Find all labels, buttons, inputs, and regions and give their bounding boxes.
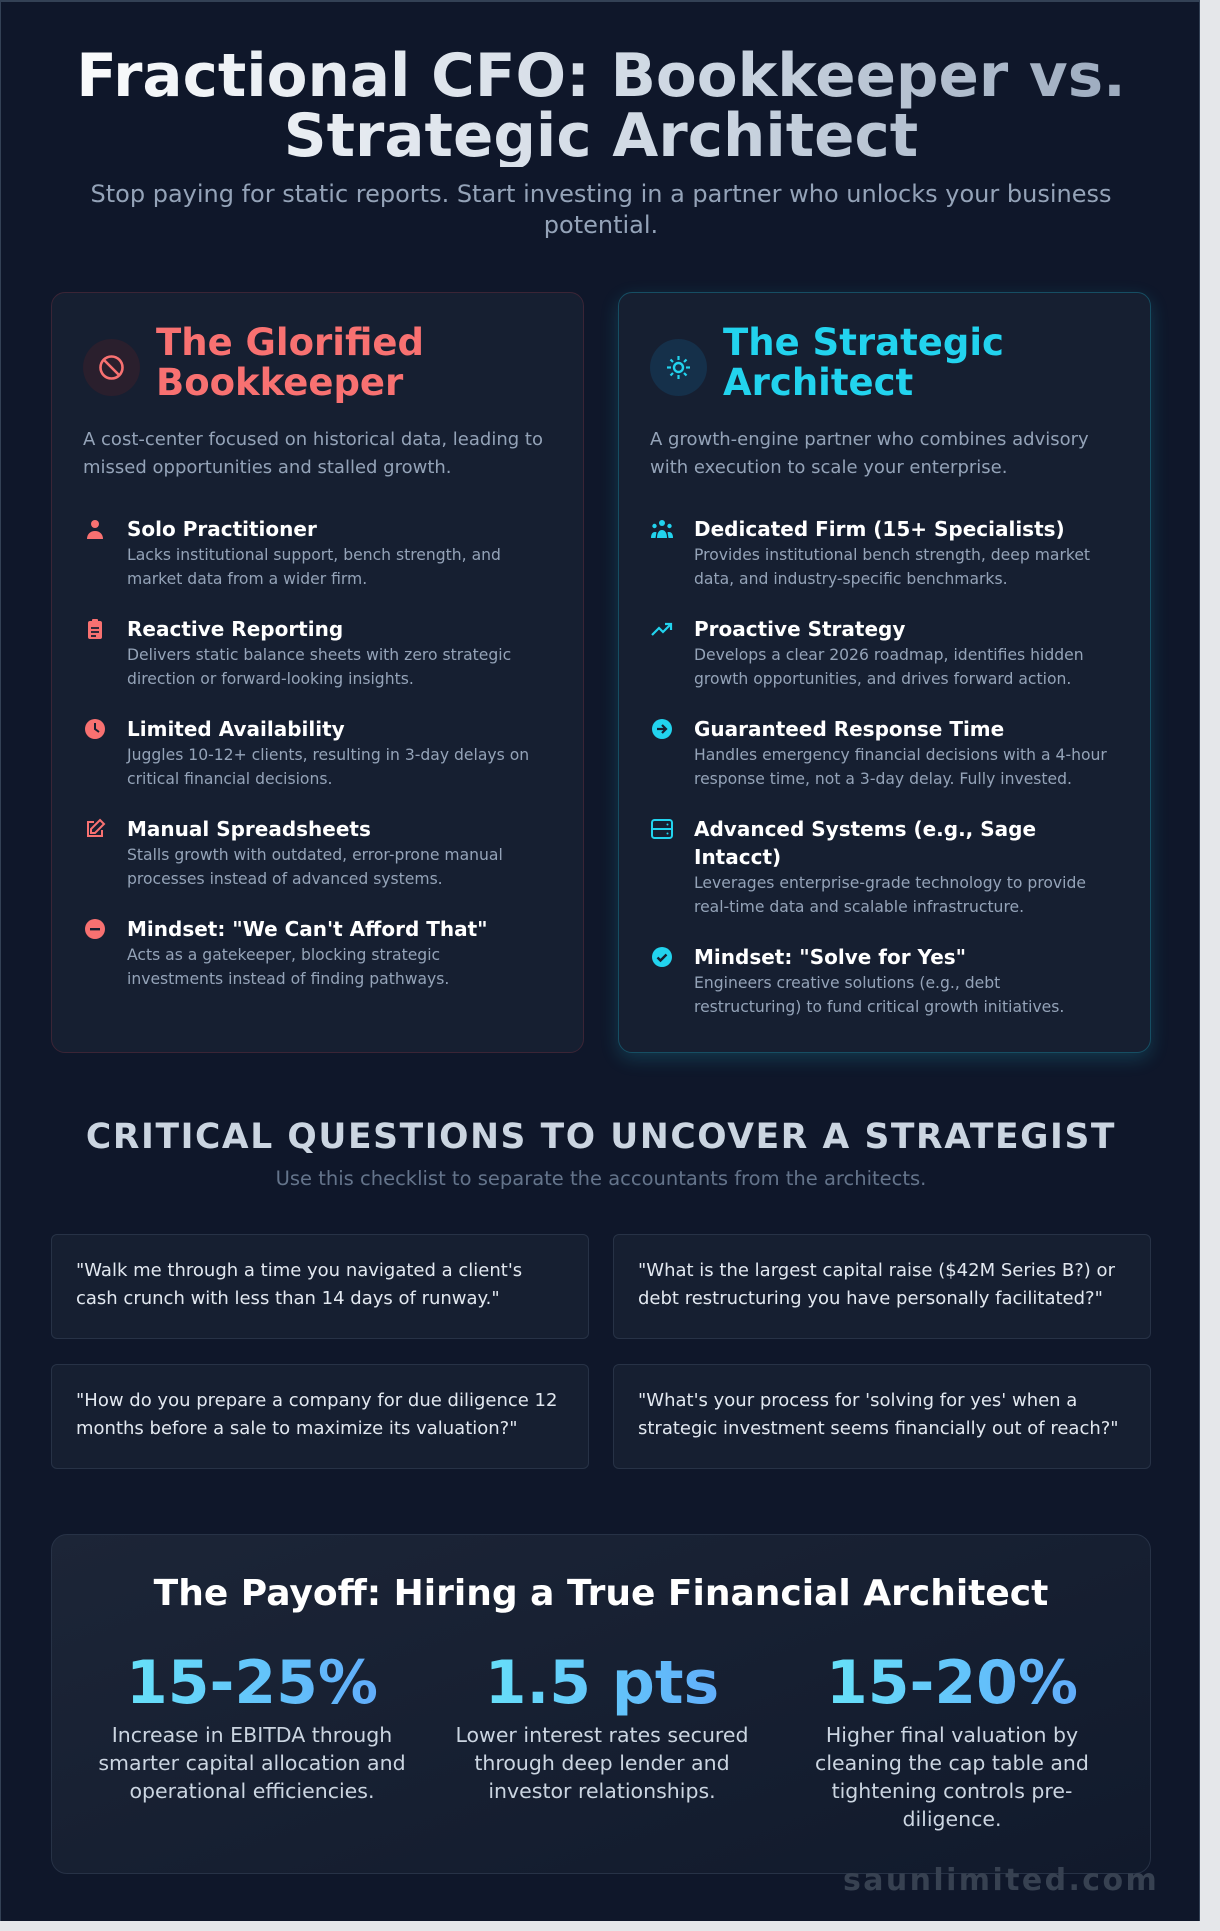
icon: clipboard xyxy=(88,619,102,639)
item: limited availability: Juggles 10-12+ clients, resulting in 3-day delays on critical financial decisions. xyxy=(127,746,529,788)
watermark: saunlimited.com xyxy=(843,1863,1159,1898)
icon: person xyxy=(87,520,103,539)
item: reactive reporting xyxy=(88,617,511,688)
title xyxy=(1,47,1201,167)
title: Fractional CFO: Bookkeeper vs. xyxy=(76,42,1126,111)
heading: critical questions: CRITICAL QUESTIONS TO UNCOVER A STRATEGIST xyxy=(86,1117,1116,1157)
title: Strategic Architect xyxy=(284,102,918,171)
heading: glorified bookkeeper: Bookkeeper xyxy=(156,361,403,404)
item: proactive strategy: Proactive Strategy xyxy=(694,617,905,641)
icon: pencil square xyxy=(87,818,106,837)
stat: valuation: Higher final valuation by cleaning the cap table and tightening controls pre-diligence. xyxy=(815,1723,1089,1831)
question 3: "How do you prepare a company for due diligence 12 months before a sale to maximize its valuation?" xyxy=(76,1390,557,1439)
item: limited availability xyxy=(85,717,529,788)
stat: interest xyxy=(455,1648,749,1803)
question 4 xyxy=(613,1364,1151,1469)
item: guaranteed response: Guaranteed Response Time xyxy=(694,717,1004,741)
item: mindset cant afford: Mindset: "We Can't Afford That" xyxy=(127,917,488,941)
stat: ebitda: Increase in EBITDA through smarter capital allocation and operational efficiencies. xyxy=(98,1723,406,1803)
item: solve for yes: Mindset: "Solve for Yes" xyxy=(694,945,966,969)
item: solve for yes: Engineers creative solutions (e.g., debt restructuring) to fund critical growth initiatives. xyxy=(694,974,1064,1016)
item: solo practitioner xyxy=(87,517,501,588)
question 4: "What's your process for 'solving for yes' when a strategic investment seems financially out of reach?" xyxy=(638,1390,1119,1439)
item: dedicated firm: Dedicated Firm (15+ Specialists) xyxy=(694,517,1065,541)
icon: prohibited xyxy=(83,339,140,396)
item: dedicated firm xyxy=(651,517,1090,588)
panel: strategic architect xyxy=(618,292,1151,1053)
item: advanced systems: Leverages enterprise-grade technology to provide real-time data and scalable infrastructure. xyxy=(694,874,1086,916)
item: manual spreadsheets: Manual Spreadsheets xyxy=(127,817,371,841)
item: solve for yes xyxy=(652,945,1064,1016)
panel: glorified bookkeeper xyxy=(51,292,584,1053)
stat: ebitda xyxy=(98,1648,406,1803)
item: dedicated firm: Provides institutional bench strength, deep market data, and industry-specific benchmarks. xyxy=(694,546,1090,588)
icon: minus circle xyxy=(85,919,105,939)
stat: interest: Lower interest rates secured through deep lender and investor relationships. xyxy=(455,1723,749,1803)
item: proactive strategy xyxy=(651,617,1084,688)
panel: payoff xyxy=(51,1534,1151,1874)
subheading: Use this checklist to separate the accountants from the architects. xyxy=(276,1167,926,1190)
item: advanced systems: Advanced Systems (e.g., Sage Intacct) xyxy=(694,817,1036,869)
heading: strategic architect xyxy=(723,321,1004,404)
icon: arrow circle xyxy=(652,719,672,739)
item: limited availability: Limited Availability xyxy=(127,717,345,741)
question 2 xyxy=(613,1234,1151,1339)
description: A cost-center focused on historical data, leading to missed opportunities and stalled growth. xyxy=(83,429,543,478)
icon: sun gear xyxy=(650,339,707,396)
icon: group xyxy=(651,520,673,538)
item: guaranteed response xyxy=(652,717,1107,788)
question 3 xyxy=(51,1364,589,1469)
subtitle: Stop paying for static reports. Start investing in a partner who unlocks your business potential. xyxy=(91,180,1111,239)
stat: interest: 1.5 pts xyxy=(485,1648,719,1718)
item: proactive strategy: Develops a clear 2026 roadmap, identifies hidden growth opportunities, and drives forward action. xyxy=(694,646,1084,688)
item: advanced systems xyxy=(651,817,1086,916)
item: manual spreadsheets: Stalls growth with outdated, error-prone manual processes instead of advanced systems. xyxy=(127,846,503,888)
stat: ebitda: 15-25% xyxy=(126,1648,378,1718)
item: guaranteed response: Handles emergency financial decisions with a 4-hour response time, not a 3-day delay. Fully invested. xyxy=(694,746,1107,788)
description: A growth-engine partner who combines advisory with execution to scale your enterprise. xyxy=(650,429,1089,478)
item: solo practitioner: Lacks institutional support, bench strength, and market data from a wider firm. xyxy=(127,546,501,588)
payoff heading: The Payoff: Hiring a True Financial Architect xyxy=(154,1573,1048,1614)
icon: check circle xyxy=(652,947,672,967)
item: reactive reporting: Reactive Reporting xyxy=(127,617,343,641)
item: reactive reporting: Delivers static balance sheets with zero strategic direction or forward-looking insights. xyxy=(127,646,511,688)
stat: valuation: 15-20% xyxy=(826,1648,1078,1718)
question 1: "Walk me through a time you navigated a client's cash crunch with less than 14 days of runway." xyxy=(76,1260,522,1309)
item: mindset cant afford xyxy=(85,917,488,988)
item: solo practitioner: Solo Practitioner xyxy=(127,517,317,541)
question 1 xyxy=(51,1234,589,1339)
heading: glorified bookkeeper xyxy=(156,321,424,404)
heading: strategic architect: The Strategic xyxy=(723,321,1004,364)
icon: server xyxy=(651,819,673,839)
question 2: "What is the largest capital raise ($42M Series B?) or debt restructuring you have personally facilitated?" xyxy=(638,1260,1115,1309)
stat: valuation xyxy=(815,1648,1089,1831)
heading: strategic architect: Architect xyxy=(723,361,913,404)
item: mindset cant afford: Acts as a gatekeeper, blocking strategic investments instead of finding pathways. xyxy=(127,946,449,988)
icon: clock xyxy=(85,719,105,739)
icon: trending up xyxy=(651,622,672,636)
heading: glorified bookkeeper: The Glorified xyxy=(156,321,424,364)
item: manual spreadsheets xyxy=(87,817,503,888)
